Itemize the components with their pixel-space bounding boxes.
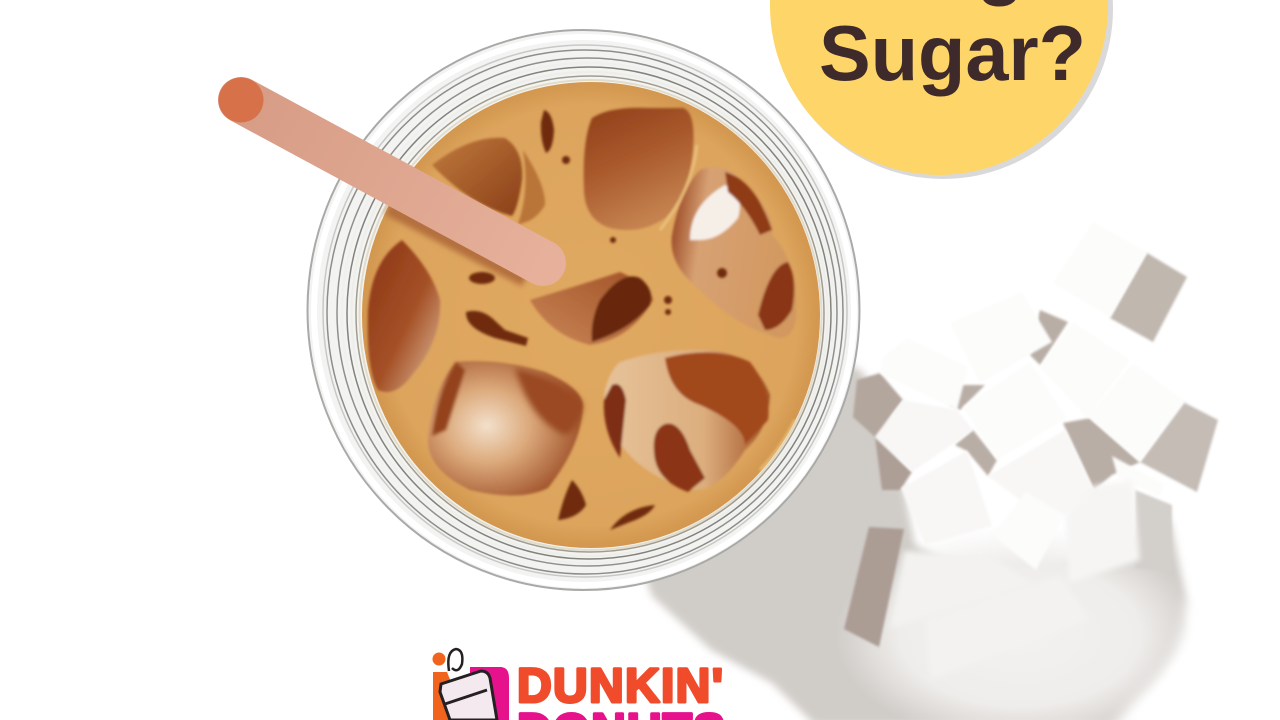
ice cube: lower right bbox=[604, 350, 770, 490]
ice cube: lower left bbox=[428, 361, 583, 496]
ice cube: upper left bbox=[432, 138, 522, 216]
cube 8 bbox=[901, 451, 992, 545]
cube 1 bbox=[1053, 222, 1147, 317]
ice cubes bbox=[368, 108, 796, 496]
cube shadows bbox=[844, 253, 1218, 647]
cube 3 bbox=[880, 338, 968, 410]
fading cubes bbox=[890, 480, 1140, 680]
cube 10 bbox=[992, 492, 1065, 570]
straw bbox=[218, 78, 543, 280]
cube 11 bbox=[1065, 480, 1140, 583]
ice cube highlights bbox=[660, 145, 795, 470]
cube 9 bbox=[988, 430, 1094, 515]
small cube bbox=[1112, 456, 1164, 496]
ice cube: left bbox=[368, 240, 440, 392]
cube 13 bbox=[925, 575, 1090, 680]
iced coffee cup bbox=[308, 30, 860, 590]
cube 6 bbox=[1088, 363, 1185, 462]
white cubes bbox=[875, 222, 1185, 570]
Dunkin' Donuts logo bbox=[432, 649, 725, 720]
yellow callout circle bbox=[770, 0, 1113, 179]
cube 12 bbox=[890, 551, 1033, 629]
cube 7 bbox=[875, 400, 973, 472]
straw shadow on coffee bbox=[388, 208, 525, 280]
ice cube: centre under straw bbox=[530, 272, 653, 345]
logo text: DUNKIN' bbox=[517, 660, 723, 713]
cube 2 bbox=[950, 292, 1052, 383]
cube 4 bbox=[963, 362, 1067, 460]
sugar cubes bbox=[844, 222, 1218, 680]
ice cube: upper centre bbox=[584, 108, 694, 230]
glass rim bbox=[308, 30, 860, 590]
cube 5 bbox=[1040, 322, 1130, 418]
logo cup icon bbox=[432, 649, 509, 720]
callout text: Sugar? bbox=[819, 9, 1086, 97]
coffee surface bbox=[362, 82, 820, 548]
coffee gaps bbox=[466, 110, 727, 530]
ice cube: right bbox=[672, 167, 796, 338]
table shadow bbox=[640, 340, 1240, 720]
